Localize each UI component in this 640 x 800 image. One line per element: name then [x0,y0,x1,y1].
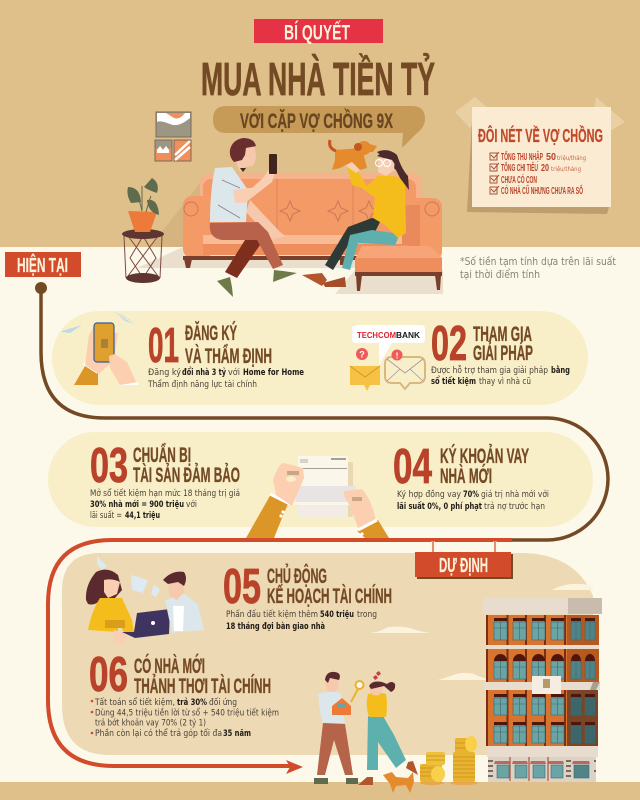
subtitle speech bubble: VỚI CẶP VỢ CHỒNG 9X [240,109,393,133]
step 04 [393,440,549,512]
icon: Techcombank bubble and envelopes: TECHCOMBANK [357,331,420,340]
icon: phone in hands [62,311,138,385]
step 03: 44,1 triệu [125,511,160,521]
step 06: 06 [89,648,128,702]
man with phone [210,138,297,297]
step 02: 02 [431,317,467,371]
title: MUA NHÀ TIỀN TỶ [201,53,435,105]
subtitle speech bubble [213,106,425,148]
note checklist: TỔNG THU NHẬP [501,150,543,163]
badge: Hiện tại [5,252,81,277]
illustration: hands holding document [246,456,389,538]
connector dot [35,282,47,294]
icon: Techcombank bubble and envelopes: ! [396,350,399,360]
footnote: *Số tiền tạm tính dựa trên lãi suất [460,256,616,268]
sofa [183,173,442,291]
house model [332,698,351,715]
step 04: giá trị nhà mới với [481,489,549,500]
bullet list: Dùng 44,5 triệu tiền lời từ sổ + 540 triệu tiết kiệm [95,708,279,718]
step 04: Ký hợp đồng vay [397,489,461,500]
bullet list: 35 năm [223,729,251,739]
sign: Dự định: DỰ ĐỊNH [439,555,488,577]
step 04: lãi suất 0%, 0 phí phạt [397,501,482,512]
label: Bí quyết: BÍ QUYẾT [284,22,350,44]
step 01: Home for Home [243,368,304,378]
step 03: 30% nhà mới = 900 triệu [90,499,184,510]
step 04: NHÀ MỚI [440,464,492,488]
step 05: 05 [223,560,261,614]
note checklist: 50 [546,152,556,163]
step 04: 04 [393,440,432,494]
step 05: trong [357,610,377,620]
label: Bí quyết [254,19,383,44]
panel: couple profile note [455,97,625,214]
step 01: với [228,367,240,378]
bullet list [91,697,279,739]
step 05 [223,560,392,632]
step 03: với [186,499,197,510]
step 03: lãi suất = [90,510,122,521]
step 05: 18 tháng đợi bàn giao nhà [226,622,325,632]
note checklist: triệu/tháng [551,165,581,173]
bullet list: đối ứng [209,697,237,708]
panel: step 05 and 06 background [62,553,593,755]
footnote [460,256,616,281]
step 03: CHUẨN BỊ [133,444,191,467]
step 01: Thẩm định năng lực tài chính [147,379,257,390]
panel: step 03 and 04 background [48,432,593,527]
step 01: 01 [148,319,179,373]
footnote: tại thời điểm tính [460,268,540,281]
woman [367,716,406,770]
icon: Techcombank bubble and envelopes: ? [359,350,365,360]
note checklist [490,150,586,197]
windows [494,622,595,778]
step 04: trả nợ trước hạn [484,501,545,512]
illustration: couple on sofa [122,112,443,297]
bullet list: trả bớt khoản vay 70% (2 tỷ 1) [95,718,206,728]
step 06 [89,648,279,739]
step 01: đổi nhà 3 tỷ [182,366,226,378]
connector line: red arrow path [48,540,512,774]
illustration: gold coin stacks [420,736,478,785]
step 03: Mở sổ tiết kiệm hạn mức 18 tháng trị giá [90,488,240,499]
cream floor strip [303,755,483,782]
woman holding dog [302,150,409,287]
step 01 [62,311,304,390]
panel: step 01 and 02 background [52,311,588,405]
golden key [351,689,358,702]
step 03: TÀI SẢN ĐẢM BẢO [133,464,240,487]
step 03 [90,439,240,521]
icon: Techcombank bubble and envelopes [350,325,425,391]
bullet list: trả 30% [177,697,207,708]
step 05: Phấn đấu tiết kiệm thêm [226,609,318,620]
bullet list: Tất toán sổ tiết kiệm, [94,697,175,708]
step 02: THAM GIA [473,323,532,346]
dog [383,772,414,793]
dog [330,140,377,170]
step 04: 70% [463,490,479,500]
note checklist: TỔNG CHI TIÊU [501,161,538,174]
note checklist: 20 [541,163,549,174]
step 01: ĐĂNG KÝ [185,321,237,345]
step 02: Được hỗ trợ tham gia giải pháp [431,365,548,376]
sign: Dự định [415,541,513,579]
step 02: sổ tiết kiệm [431,375,476,387]
step 01: VÀ THẨM ĐỊNH [185,345,272,368]
picture frames [155,112,191,161]
note checklist: triệu/tháng [557,154,586,162]
step 02: GIẢI PHÁP [473,342,533,365]
clouds [370,584,593,680]
step 03: 03 [90,439,128,493]
side table and plant [122,178,164,283]
step 06: CÓ NHÀ MỚI [134,654,205,678]
step 05: 540 triệu [320,610,354,620]
illustration: couple with laptop [86,556,204,644]
step 02 [350,317,570,391]
bullet list: Phần còn lại có thể trả góp tối đa [95,728,222,739]
step 05: KẾ HOẠCH TÀI CHÍNH [267,585,392,608]
note checklist: CHƯA CÓ CON [501,173,537,186]
connector line: brown path [41,288,608,540]
illustration: new-home couple [314,671,418,793]
step 05: CHỦ ĐỘNG [267,564,327,588]
step 06: THẢNH THƠI TÀI CHÍNH [134,675,271,698]
step 01: Đăng ký [148,368,181,378]
badge: Hiện tại: HIỆN TẠI [17,253,68,277]
step 02: thay vì nhà cũ [479,377,531,387]
hearts [373,671,381,680]
step 02: bằng [551,365,570,376]
step 04: KÝ KHOẢN VAY [440,444,529,468]
illustration: building [483,598,602,782]
